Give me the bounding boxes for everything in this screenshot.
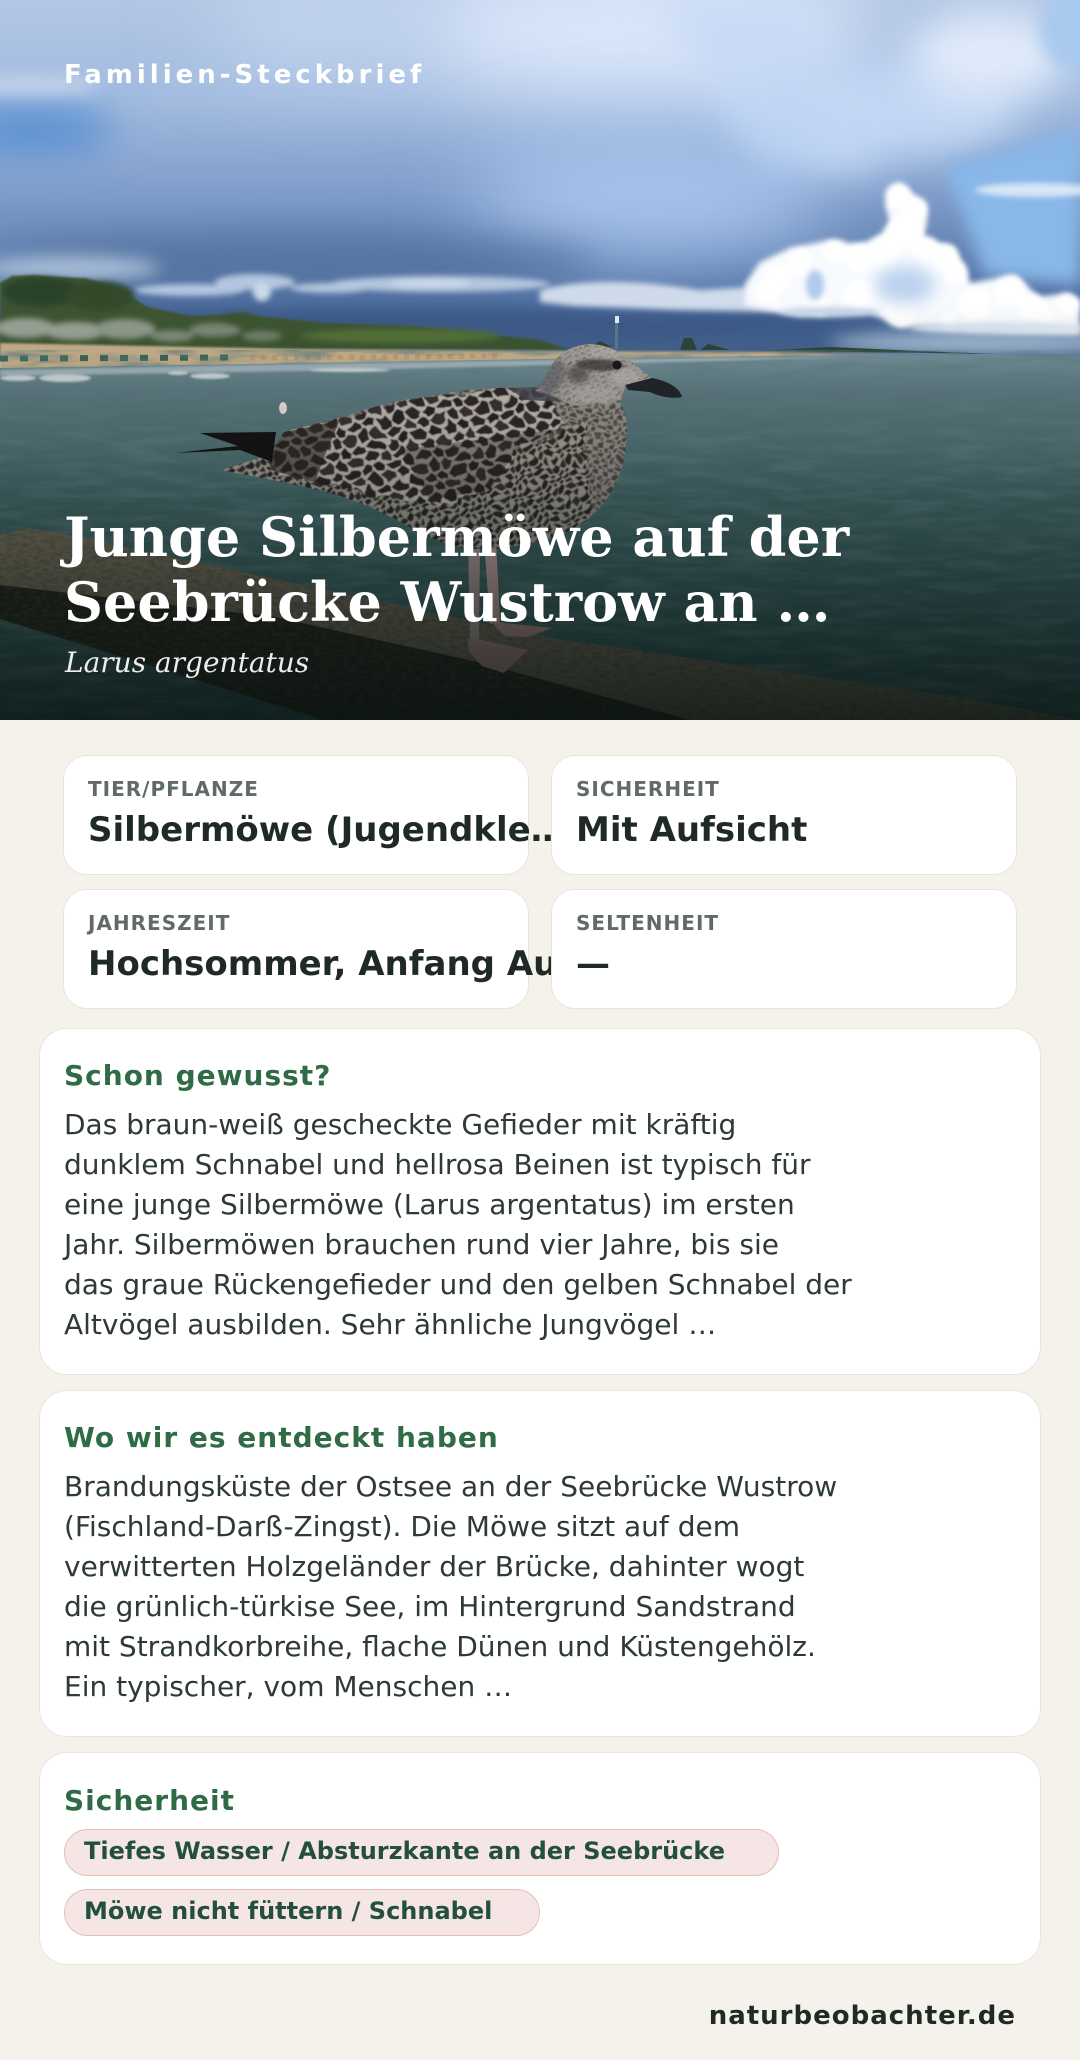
fact card: Sicherheit: Mit Aufsicht: [576, 810, 807, 850]
body text: Schon gewusst: eine junge Silbermöwe (Larus argentatus) im ersten: [64, 1188, 795, 1221]
body text: Schon gewusst: dunklem Schnabel und hellrosa Beinen ist typisch für: [64, 1148, 810, 1181]
footer brand: naturbeobachter.de: [709, 2001, 1016, 2031]
fact card: Tier/Pflanze: TIER/PFLANZE: [88, 777, 259, 801]
safety pill: deep water: Tiefes Wasser / Absturzkante an der Seebrücke: [84, 1836, 725, 1864]
fact card: Seltenheit: SELTENHEIT: [576, 911, 719, 935]
safety pill: do not feed: [64, 1888, 540, 1936]
dunes with shrubs and trees: [0, 275, 1000, 354]
fact card: Seltenheit: —: [576, 944, 610, 984]
herring gull body with mottled plumage: [176, 344, 682, 550]
panel: Sicherheit: [39, 1752, 1041, 1964]
fact card: Jahreszeit: [63, 888, 529, 1009]
safety pill: deep water: [64, 1828, 779, 1876]
beach with row of beach chairs: [0, 343, 900, 370]
fact card: Seltenheit: [551, 888, 1017, 1009]
fact card: Sicherheit: SICHERHEIT: [576, 777, 720, 801]
body text: Fundort: mit Strandkorbreihe, flache Dünen und Küstengehölz.: [64, 1630, 816, 1663]
hero banner with photo and title: [0, 0, 1080, 720]
body text: Schon gewusst: [62, 1108, 852, 1341]
gull beak: [625, 378, 682, 398]
body text: Fundort: die grünlich-türkise See, im Hintergrund Sandstrand: [64, 1590, 796, 1623]
gull eye: [612, 360, 622, 370]
fact card: Tier/Pflanze: [63, 754, 529, 875]
heading: Sicherheit: Sicherheit: [64, 1784, 235, 1816]
body text: Fundort: verwitterten Holzgeländer der Brücke, dahinter wogt: [64, 1550, 804, 1583]
tail feathers: [175, 432, 276, 462]
safety pill: do not feed: Möwe nicht füttern / Schnabel: [84, 1896, 492, 1924]
hero photo: young herring gull on pier railing: [0, 0, 1080, 720]
fact card: Tier/Pflanze: Silbermöwe (Jugendkle…: [88, 810, 565, 850]
body text: Schon gewusst: das graue Rückengefieder und den gelben Schnabel der: [64, 1268, 852, 1301]
latin species name: Larus argentatus: [65, 646, 309, 679]
body text: Schon gewusst: Altvögel ausbilden. Sehr ähnliche Jungvögel …: [64, 1308, 716, 1341]
body text: Fundort: [64, 1470, 837, 1703]
herring gull legs and feet: [467, 540, 552, 673]
body text: Schon gewusst: Jahr. Silbermöwen brauchen rund vier Jahre, bis sie: [64, 1228, 779, 1261]
sea with ripples and surf: [0, 355, 1080, 720]
title: two lines: Junge Silbermöwe auf der: [64, 505, 849, 569]
eyebrow: Familien-Steckbrief: Familien-Steckbrief: [64, 60, 425, 90]
heading: Schon gewusst: Schon gewusst?: [64, 1058, 331, 1092]
sky with soft cloud masses: [0, 0, 1080, 360]
body text: Schon gewusst: Das braun-weiß gescheckte Gefieder mit kräftig: [64, 1108, 736, 1141]
heading: Wo wir es entdeckt haben: Wo wir es entdeckt haben: [64, 1420, 499, 1454]
panel: Schon gewusst: [39, 1028, 1041, 1375]
body text: Fundort: Ein typischer, vom Menschen …: [64, 1670, 512, 1703]
panel: Wo wir es entdeckt haben: [39, 1390, 1041, 1737]
fact card: Jahreszeit: JAHRESZEIT: [88, 911, 230, 935]
low cloud band and cumulus clouds: [135, 183, 1080, 335]
body text: Fundort: (Fischland-Darß-Zingst). Die Möwe sitzt auf dem: [64, 1510, 740, 1543]
fact card: Sicherheit: [551, 754, 1017, 875]
dark gradient overlay behind title: [0, 0, 1080, 720]
title: two lines: [60, 505, 850, 634]
wooden pier railing: [0, 520, 1080, 720]
title: two lines: Seebrücke Wustrow an …: [64, 570, 830, 634]
body text: Fundort: Brandungsküste der Ostsee an der Seebrücke Wustrow: [64, 1470, 837, 1503]
fact card: Jahreszeit: Hochsommer, Anfang August: [88, 944, 642, 984]
